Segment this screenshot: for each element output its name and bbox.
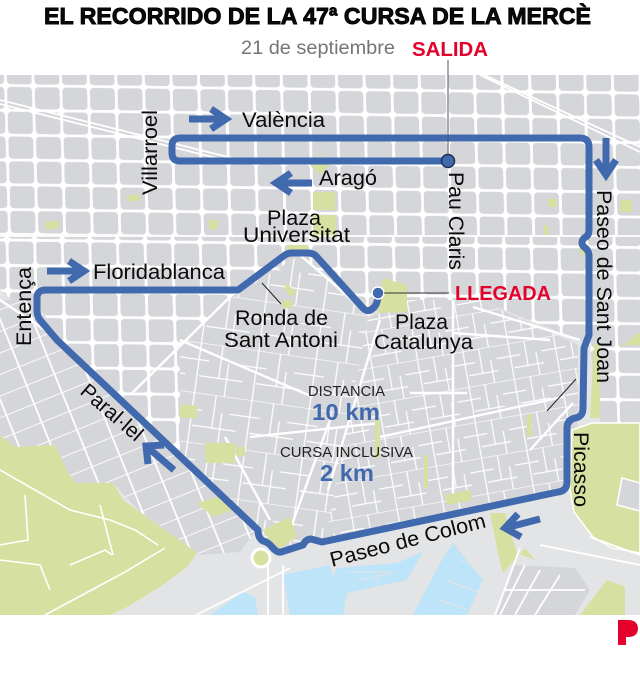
label: Entença: Entença	[13, 267, 36, 346]
map panel	[0, 75, 640, 615]
Port Vell roundabout	[252, 549, 270, 567]
Montjuïc paths	[0, 470, 165, 615]
arrow: València	[189, 109, 226, 129]
label: Plaza Universitat: Plaza	[267, 207, 321, 230]
callout line: llegada	[384, 292, 449, 294]
start marker	[442, 154, 454, 168]
marina piers	[347, 560, 480, 610]
label: Ronda de Sant Antoni	[224, 307, 338, 352]
inclusive race value: 2 km	[320, 460, 374, 486]
label: Villarroel: Villarroel	[139, 110, 162, 195]
Montjuïc park	[0, 435, 197, 615]
harbour water	[210, 543, 483, 615]
arrow: Floridablanca	[47, 261, 84, 281]
small green squares	[45, 155, 632, 573]
callout line: salida	[447, 60, 449, 155]
logo	[618, 620, 638, 645]
label: llegada: LLEGADA	[455, 282, 551, 305]
arrow: Paseo de Colom	[505, 514, 540, 537]
old town main streets	[0, 255, 580, 530]
route	[37, 138, 589, 552]
upper Eixample street grid	[0, 75, 640, 235]
label: Plaza Catalunya: Plaza	[395, 311, 448, 334]
map background	[0, 75, 640, 615]
footer background	[0, 615, 640, 677]
distance block	[308, 384, 385, 425]
callout line: Picasso	[547, 379, 576, 411]
finish marker	[372, 287, 384, 299]
Ciutadella lake plaza	[617, 478, 640, 511]
label: Plaza Universitat	[243, 207, 350, 247]
date subtitle: 21 de septiembre	[241, 37, 395, 59]
Ciutadella park	[570, 423, 640, 553]
inclusive race block	[280, 445, 413, 486]
label: Paseo de Sant Joan: Paseo de Sant Joan	[592, 190, 615, 383]
Poble Sec streets	[0, 300, 258, 555]
label: Paral·lel: Paral·lel	[76, 379, 147, 446]
distance value: 10 km	[312, 399, 380, 425]
inclusive race caption: CURSA INCLUSIVA	[280, 445, 413, 461]
label: salida: SALIDA	[412, 38, 488, 61]
label: Plaza Universitat: Universitat	[243, 224, 350, 247]
distance caption: DISTANCIA	[308, 384, 385, 400]
Sant Antoni and Raval streets	[180, 255, 368, 548]
label: Pau Claris: Pau Claris	[444, 172, 467, 270]
Paseo de Sant Joan green	[590, 344, 600, 418]
label: Paseo de Colom: Paseo de Colom	[327, 510, 488, 572]
label: Plaza Catalunya	[374, 311, 473, 354]
port park	[580, 580, 625, 615]
lower Eixample street grid	[0, 235, 640, 455]
arrow: Paseo de Sant Joan	[596, 138, 616, 175]
label: Aragó: Aragó	[319, 167, 377, 190]
label: Floridablanca: Floridablanca	[93, 261, 225, 284]
main avenues	[0, 75, 640, 615]
callout line: Ronda de Sant Antoni	[262, 283, 281, 304]
label: Plaza Catalunya: Catalunya	[374, 331, 473, 354]
label: Ronda de Sant Antoni: Sant Antoni	[224, 329, 338, 352]
title: EL RECORRIDO DE LA 47ª CURSA DE LA MERCÈ	[44, 2, 591, 29]
arrow: Paral·lel	[146, 445, 174, 470]
label: Picasso: Picasso	[569, 432, 592, 507]
label: València: València	[242, 109, 325, 132]
Barceloneta blocks	[497, 565, 590, 615]
arrow: Aragó	[276, 173, 312, 193]
Gothic quarter streets	[325, 300, 578, 540]
label: Ronda de Sant Antoni: Ronda de	[235, 307, 328, 330]
